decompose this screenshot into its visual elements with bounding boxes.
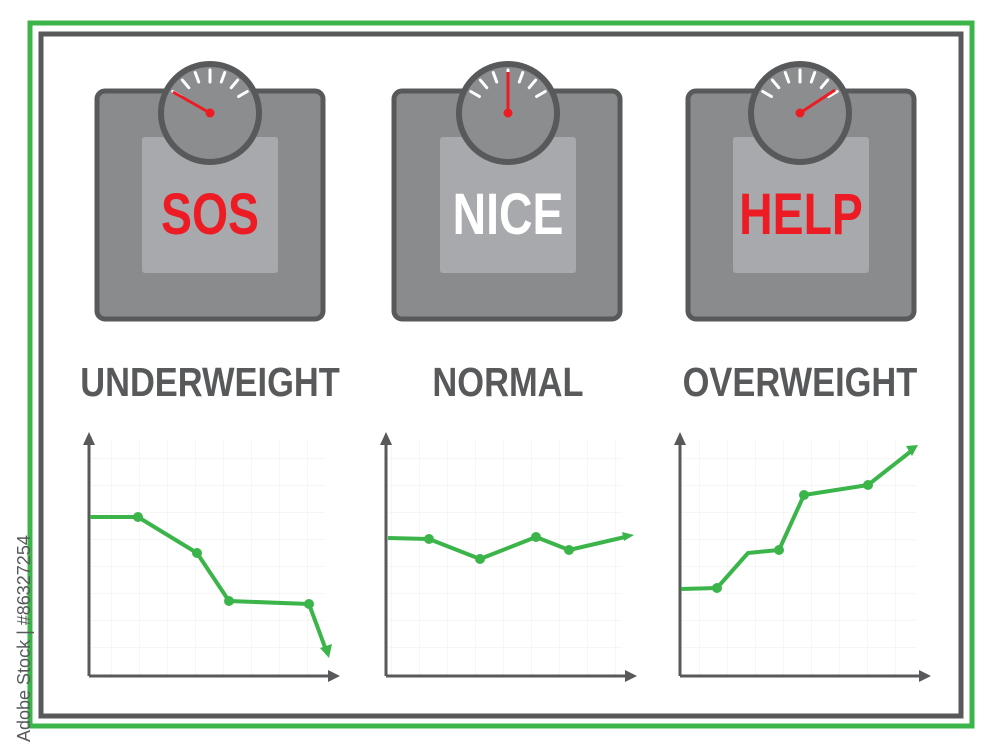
label: normal: NORMAL	[432, 360, 584, 406]
watermark text: Adobe Stock | #86327254	[14, 535, 34, 742]
label: overweight: OVERWEIGHT	[683, 360, 917, 406]
text: HELP: HELP	[739, 182, 863, 247]
scale: normal	[394, 64, 620, 319]
scale: overweight	[688, 64, 914, 319]
dial	[459, 64, 557, 162]
scale: underweight	[97, 64, 323, 319]
text: SOS: SOS	[161, 182, 259, 247]
dial	[161, 64, 259, 162]
chart: underweight	[83, 432, 340, 682]
chart: normal	[380, 432, 637, 682]
text: NICE: NICE	[453, 182, 563, 247]
dial	[751, 64, 849, 162]
label: underweight: UNDERWEIGHT	[80, 360, 340, 406]
chart: overweight	[674, 432, 931, 682]
